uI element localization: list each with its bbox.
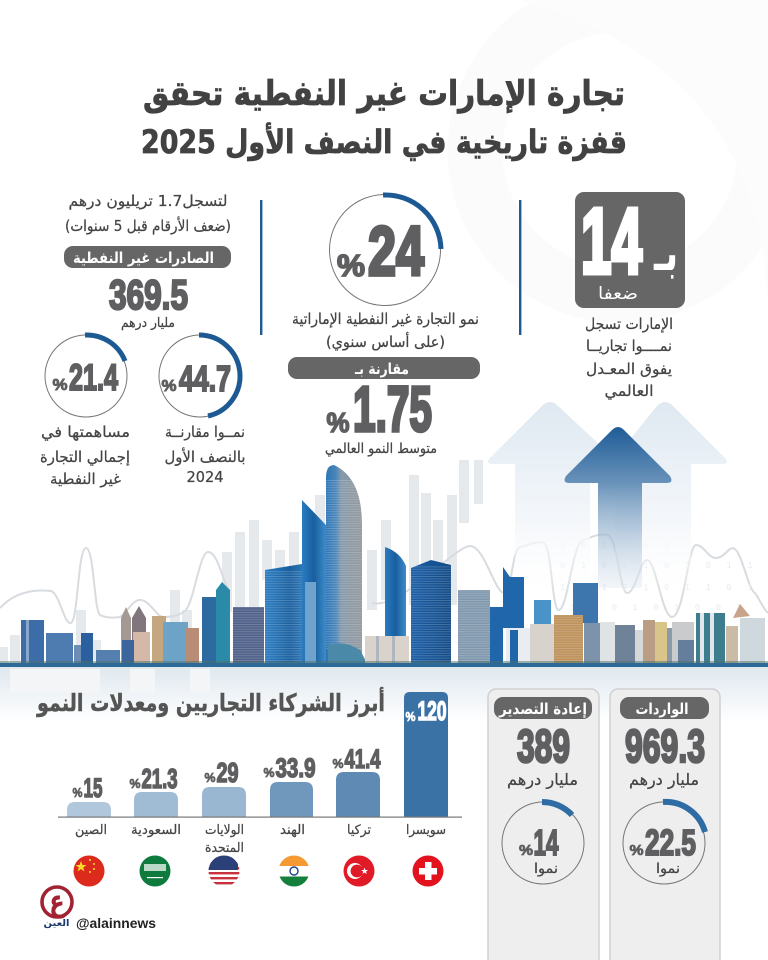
- bar: Turkey: [332, 744, 380, 838]
- ring chart: 14: %: [519, 842, 533, 859]
- bar: India: %: [264, 765, 275, 780]
- blue sail tower: [302, 500, 326, 663]
- background chart and arrows: 1 1 0 1 0 1 0 0 1: [570, 603, 747, 613]
- bar: Saudi Arabia: %: [130, 776, 141, 791]
- ring chart: 44.7: 44.7: [179, 358, 231, 399]
- bar: Saudi Arabia: السعودية: [131, 823, 181, 838]
- ring chart: 21.4: %: [52, 377, 68, 394]
- caption: growth vs H1 2024: نمــوا مقارنــة: [165, 423, 245, 441]
- pill: [64, 246, 231, 268]
- caption: share of non-oil trade: مساهمتها في: [41, 423, 130, 442]
- bar: Saudi Arabia: [130, 763, 181, 838]
- skyline illustration: [0, 465, 768, 722]
- blue corner tower: [490, 567, 524, 663]
- panel: 24 percent growth: [288, 194, 480, 457]
- description: العالمي: [604, 382, 654, 401]
- icon: pale arrow left: [488, 402, 616, 600]
- description: نمو التجارة غير النفطية الإماراتية: [292, 310, 479, 328]
- ring arc: [383, 195, 441, 249]
- caption: share of non-oil trade: إجمالي التجارة: [40, 448, 130, 467]
- description: نمــــوا تجاريــا: [586, 337, 672, 355]
- panel: 14 times: [575, 189, 685, 401]
- pill label: إعادة التصدير: [498, 700, 587, 718]
- caption: share of non-oil trade: [40, 423, 130, 488]
- bar: United States: [202, 757, 246, 856]
- panel: re-exports: [488, 689, 599, 960]
- description: يفوق المعـدل: [586, 360, 672, 378]
- badge: [575, 192, 685, 308]
- ring chart: 22.5: [623, 802, 705, 884]
- unit: مليار درهم: [629, 770, 699, 790]
- title: [141, 74, 627, 161]
- ring chart: 14: [502, 802, 584, 884]
- bar: China: [67, 773, 111, 838]
- bar chart: trade partners: [58, 692, 462, 856]
- intro text: لتسجل1.7 تريليون درهم: [68, 192, 228, 210]
- unit: مليار درهم: [121, 316, 175, 331]
- bar: Switzerland: سويسرا: [406, 823, 446, 838]
- bar: Turkey: تركيا: [347, 823, 371, 838]
- grey tower: [458, 590, 490, 663]
- bar: Turkey: %: [332, 756, 344, 771]
- caption: growth vs H1 2024: بالنصف الأول: [164, 447, 246, 466]
- number 969.3: 969.3: [625, 720, 705, 772]
- big number 14: 14: [581, 189, 642, 293]
- description: الإمارات تسجل: [585, 315, 673, 333]
- panel: non-oil exports: [40, 192, 246, 488]
- bar: India: الهند: [280, 823, 305, 838]
- bar: China: 15: [84, 773, 102, 803]
- bar: Switzerland: 120: [418, 696, 446, 726]
- icon: flag of Switzerland: [412, 856, 444, 886]
- main tower: [326, 465, 362, 663]
- social handle: @alainnews: [76, 915, 156, 931]
- pill label: الواردات: [636, 700, 688, 718]
- background chart and arrows: 1 0 1 1 0 1: [560, 541, 674, 551]
- bar: China: %: [72, 785, 83, 800]
- pill label: الصادرات غير النفطية: [73, 249, 214, 267]
- logo: Al Ain: [42, 884, 72, 929]
- bar: Switzerland: [404, 692, 448, 838]
- caption: share of non-oil trade: غير النفطية: [50, 470, 121, 488]
- bar: Saudi Arabia: 21.3: [142, 763, 178, 794]
- icon: pale arrow right: [610, 402, 727, 600]
- background chart and arrows: [0, 402, 768, 686]
- number 24: 24: [368, 212, 424, 290]
- pill: [620, 697, 709, 719]
- times label: ضعفا: [598, 284, 638, 304]
- bar: United States: المتحدة: [205, 841, 244, 856]
- ring chart: 14: نموا: [534, 861, 558, 877]
- pill: [494, 697, 592, 719]
- ring chart: 22.5: نموا: [656, 861, 680, 877]
- intro text: (ضعف الأرقام قبل 5 سنوات): [65, 216, 231, 235]
- pill: compared with: [288, 357, 480, 379]
- intro text: [65, 192, 231, 235]
- ring chart: 22.5: %: [630, 842, 644, 859]
- blue glass tower: [573, 583, 598, 623]
- icon: flag of Turkey: [344, 856, 374, 886]
- percent sign: %: [337, 248, 365, 283]
- annual basis note: (على أساس سنوي): [326, 332, 445, 352]
- letter ba: بـ: [653, 224, 678, 282]
- number 1.75: 1.75: [353, 373, 432, 445]
- bar: India: [264, 753, 316, 838]
- bar: Turkey: 41.4: [344, 744, 380, 774]
- bar: China: الصين: [75, 823, 107, 838]
- logo: Al Ain: العين: [44, 919, 70, 929]
- divider right: [519, 200, 521, 335]
- number 389: 389: [517, 720, 570, 772]
- caption: growth vs H1 2024: 2024: [186, 468, 224, 486]
- title: تجارة الإمارات غير النفطية تحقق: [143, 74, 625, 114]
- pill label: مقارنة بـ: [354, 360, 409, 378]
- description: [585, 315, 673, 401]
- background chart and arrows: 0 1 0 1 1 0 1 0 1 1: [560, 561, 758, 571]
- waterline: [0, 663, 768, 667]
- ring chart: 21.4: [45, 335, 127, 417]
- twin blue block: [411, 560, 451, 663]
- logo: Al Ain: ع: [50, 884, 66, 919]
- divider left: [260, 200, 262, 335]
- small right towers: [584, 623, 600, 663]
- icon: flag of United States: [208, 856, 240, 884]
- caption: متوسط النمو العالمي: [325, 441, 437, 457]
- bar: United States: %: [204, 770, 216, 785]
- blue tower block: [265, 564, 315, 663]
- ring chart: 21.4: 21.4: [69, 357, 118, 398]
- ring chart: 44.7: %: [162, 378, 176, 395]
- icon: flag of Saudi Arabia: [140, 856, 170, 886]
- panel: imports: [610, 689, 720, 960]
- heading: trade partners: أبرز الشركاء التجاريين ومعدلات النمو: [36, 687, 385, 717]
- small left towers: [21, 620, 44, 663]
- bar: United States: الولايات: [205, 823, 244, 838]
- bar: India: 33.9: [276, 753, 316, 783]
- percent sign: %: [326, 407, 350, 438]
- number 369.5: 369.5: [109, 271, 188, 318]
- ring: [330, 194, 440, 306]
- bar: Switzerland: %: [406, 709, 416, 724]
- golden tower: [554, 615, 583, 663]
- bar: United States: 29: [216, 757, 238, 788]
- icon: flag of India: [279, 856, 309, 886]
- curved tower: [385, 547, 406, 636]
- unit: مليار درهم: [507, 770, 578, 790]
- caption: growth vs H1 2024: [164, 423, 246, 486]
- icon: flag of China: [74, 856, 104, 886]
- icon: dark arrow up: [565, 427, 671, 588]
- ring chart: 22.5: 22.5: [645, 822, 696, 863]
- ring chart: 14: 14: [534, 822, 558, 863]
- ring chart: 44.7: [159, 335, 241, 417]
- title: قفزة تاريخية في النصف الأول 2025: [141, 122, 627, 161]
